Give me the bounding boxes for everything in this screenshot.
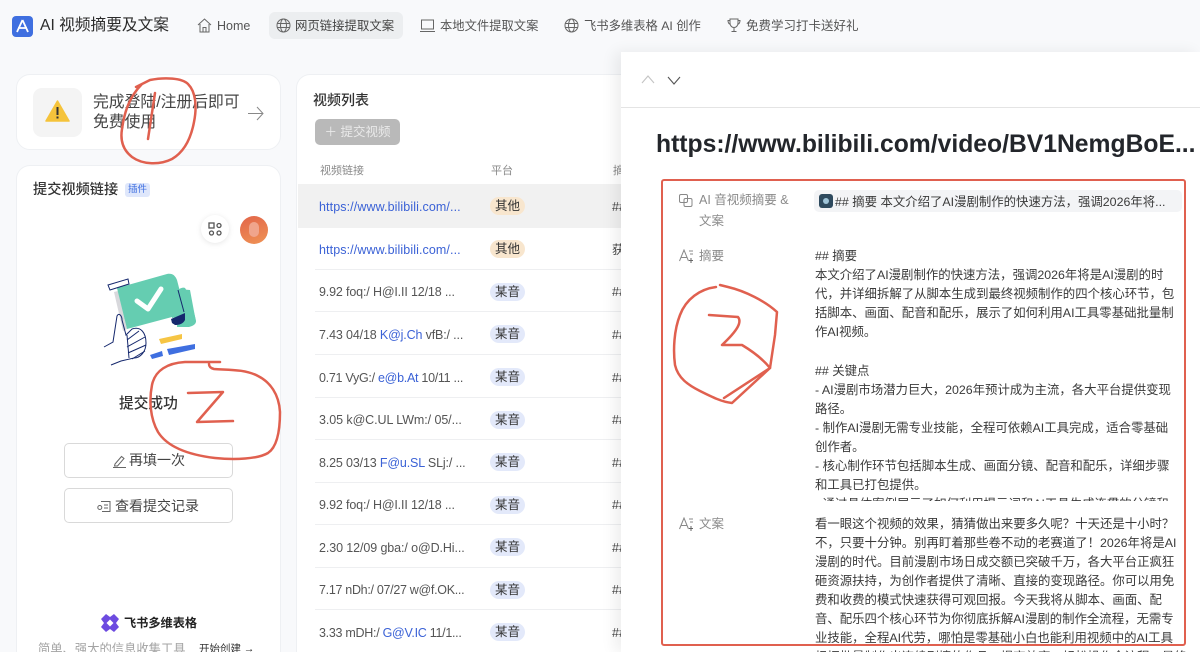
icon: trophy [728,18,740,32]
record title: https://www.bilibili.com/video/BV1NemgBoE... [656,131,1196,158]
row 5: 某音 [495,370,520,384]
row 5 [315,368,641,398]
row 3 [315,283,641,312]
row 8: 9.92 foq:/ H@I.II 12/18 ... [319,498,455,512]
notice text: 完成登陆/注册后即可 [93,94,240,111]
row 4: 某音 [495,327,520,341]
table header [320,164,635,177]
panel heading: 视频列表 [313,92,369,108]
label text: 摘要 [699,249,724,263]
annotation: circled number 2 [149,360,282,460]
panel: submit video link [16,165,281,652]
field value: copy text: 费和收费的模式快速获得可观回报。今天我将从脚本、画面、配 [815,593,1162,607]
field value: summary text: 作AI视频。 [815,325,876,339]
field value: summary text: 代，并详细拆解了从脚本生成到最终视频制作的四个核心环节，包 [815,287,1174,301]
row 8 [315,496,641,525]
nav item: active web link extraction [269,12,403,39]
field value: summary text: 创作者。 [815,440,865,454]
label text: 文案 [699,517,724,531]
field label: summary [679,249,724,263]
field value: summary text: - 制作AI漫剧无需专业技能，全程可依赖AI工具完成，适合零基础 [815,421,1168,435]
field value chip [814,190,1182,212]
notice text: 免费使用 [93,114,156,131]
icon: records [97,501,110,512]
field value: copy text: 漫剧的时代。目前漫剧市场日成交额已突破千万，各大平台正疯狂 [815,555,1174,569]
nav item: home: Home [217,19,250,33]
field label: AI summary and copy [679,193,789,228]
row 7: 某音 [495,455,520,469]
panel: video list [296,74,641,652]
feishu bitable name: 飞书多维表格 [124,616,197,630]
row 11: 某音 [495,625,520,639]
table header: 视频链接 [320,165,364,177]
row 2: 其他 [495,242,520,256]
field value: summary text [815,249,1174,501]
icon: warning [33,88,82,137]
label text [699,193,789,228]
field value: copy text [815,517,1187,652]
row 9: 2.30 12/09 gba:/ o@D.Hi... [319,540,465,554]
annotation: circled number 3 [672,284,778,404]
app title: AI 视频摘要及文案 [40,17,169,34]
row 10: 7.17 nDh:/ 07/27 w@f.OK... [319,583,464,597]
field value: summary text: 和工具已打包提供。 [815,478,927,492]
icon: next chevron [668,76,680,85]
panel heading: 提交视频链接 [33,182,118,198]
field value: summary text: ## 关键点 [815,364,869,378]
nav label: web link extraction: 网页链接提取文案 [295,19,394,33]
row 3: 9.92 foq:/ H@I.II 12/18 ... [319,285,455,299]
field value: summary text: ## 摘要 [815,249,857,263]
notice text [93,93,240,131]
row 8: 某音 [495,498,520,512]
row 1 selected [298,184,622,228]
row 10: 某音 [495,582,520,596]
row 2: https://www.bilibili.com/... [319,242,461,256]
illustration: submit success [104,274,196,366]
field value: summary text: 本文介绍了AI漫剧制作的快速方法，强调2026年将是AI漫剧的时 [815,268,1163,282]
icon: link copy [679,194,692,207]
icon: previous chevron [642,75,654,84]
field label: copy [679,517,724,531]
icon: home [198,18,212,32]
row 2 [315,240,637,270]
table header: 摘要 [613,165,635,177]
annotation: circled number 1 [120,77,197,164]
panel: login notice [16,74,281,150]
icon: laptop [420,20,435,32]
icon: app logo [12,16,33,37]
row 4: 7.43 04/18 K@j.Ch vfB:/ ... [319,328,463,342]
nav item: free study gift: 免费学习打卡送好礼 [746,19,859,33]
field value: summary text: 括脚本、画面、配音和配乐，展示了如何利用AI工具零基础批量制 [815,306,1174,320]
row 6: 某音 [495,412,520,426]
annotation: red frame around detail fields [661,178,1186,646]
row 9 [315,538,641,568]
row 7 [315,453,641,483]
field value: copy text: 看一眼这个视频的效果，猜猜做出来要多久呢？十天还是十小时？ [815,517,1174,531]
field value: copy text: 砸资源扶持，为创作者提供了清晰、直接的变现路径。你可以用免 [815,574,1174,588]
row 1 selected: 其他 [495,199,520,213]
badge: plugin [125,183,150,197]
icon: QR code [201,215,229,243]
row 7: 8.25 03/13 F@u.SL SLj:/ ... [319,456,465,470]
success message: 提交成功 [119,396,178,412]
row 10 [315,581,641,610]
icon: AI text [679,517,693,531]
row 1 selected: https://www.bilibili.com/... [319,200,461,214]
field value: summary text: - AI漫剧市场潜力巨大，2026年预计成为主流，各大平台提供变现 [815,383,1171,397]
table header: 平台 [491,165,513,177]
field value: copy text: 业技能，全程AI代劳，哪怕是零基础小白也能利用视频中的AI工具 [815,631,1173,645]
field value: copy text: 不，只要十分钟。别再盯着那些卷不动的老赛道了！2026年将是AI [815,536,1176,550]
row 6: 3.05 k@C.UL LWm:/ 05/... [319,413,462,427]
button: view records [64,488,233,523]
button label: 再填一次 [129,452,185,468]
top navigation bar [12,12,859,39]
icon: arrow right [248,106,264,120]
icon: chip logo [819,194,833,208]
button: submit video: ＋ 提交视频 [324,125,390,139]
badge: plugin: 插件 [128,184,147,195]
button: fill again [64,443,233,478]
field value: summary text: - 核心制作环节包括脚本生成、画面分镜、配音和配乐，详细步骤 [815,459,1170,473]
button label: 查看提交记录 [115,498,199,514]
icon: globe [276,18,290,32]
button: submit video [315,119,400,145]
panel: record detail [621,52,1200,652]
row 3: 某音 [495,284,520,298]
icon: globe [564,18,578,32]
label text: AI 音视频摘要 & [699,193,789,207]
icon: feishu bitable logo [101,614,119,632]
row 9: 某音 [495,540,520,554]
header divider [621,107,1200,108]
label text: 文案 [699,214,724,228]
row 11: 3.33 mDH:/ G@V.IC 11/1... [319,626,462,640]
chip text: ## 摘要 本文介绍了AI漫剧制作的快速方法，强调2026年将... [835,195,1165,209]
icon: AI text [679,249,693,263]
icon: pencil [113,456,126,468]
panel: video list: 获取 [612,242,637,256]
row 4 [315,325,641,355]
nav item: feishu AI creation: 飞书多维表格 AI 创作 [584,19,701,33]
nav item: local file extraction: 本地文件提取文案 [440,19,538,33]
icon: avatar [240,216,268,244]
field value: copy text: 音、配乐四个核心环节为你彻底拆解AI漫剧的制作全流程，无需专 [815,612,1174,626]
row 11 [319,623,641,641]
row 5: 0.71 VyG:/ e@b.At 10/11 ... [319,370,463,384]
field value: summary text: 路径。 [815,402,852,416]
row 6 [315,411,641,440]
